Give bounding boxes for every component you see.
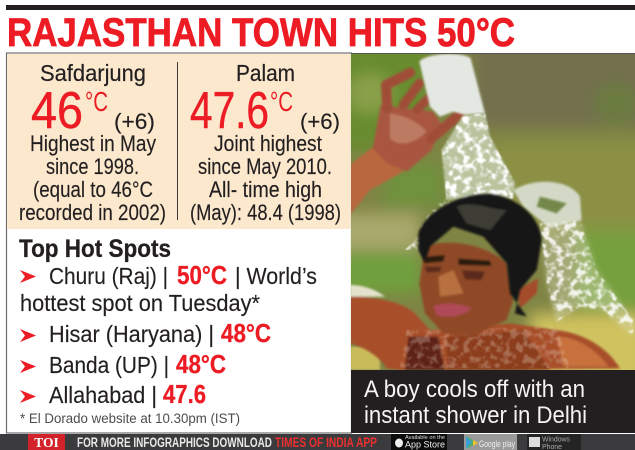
column: Palam: 47.6 [190,82,269,140]
raised hand and arm [350,73,460,215]
list item: Churu: | World’s [235,263,317,289]
title: RAJASTHAN TOWN HITS 50°C [7,11,515,55]
list item: Banda: 48°C [176,349,226,379]
water bottle [419,54,485,117]
photo background [351,54,635,370]
list item: Churu [20,260,317,316]
heading: Top Hot Spots [19,235,171,263]
list item: Allahabad: 47.6 [163,379,206,409]
column: Palam [190,60,341,225]
column: Palam: Palam [236,60,295,86]
panel: delhi temperatures [6,53,352,433]
column: Palam: since May 2010. [198,154,332,179]
column: Safdarjung [19,60,166,225]
footer bar [0,434,635,450]
panel: top hot spots [19,235,317,426]
column: Safdarjung: since 1998. [46,154,139,179]
list item: Hisar [20,318,271,348]
list item: Churu: Churu (Raj) | [49,263,168,289]
photo caption: A boy cools off with an [364,376,585,403]
windows phone badge [527,434,581,450]
list item: Hisar: Hisar (Haryana) | [49,321,214,347]
column: Palam: Joint highest [214,131,322,156]
list item: Banda: Banda (UP) | [49,352,169,378]
column: Safdarjung: 46 [31,82,83,140]
column: Palam: (May): 48.4 (1998) [190,200,341,225]
TOI logo: TOI [34,435,59,450]
download prompt: TIMES OF INDIA APP [275,435,377,450]
top rule [6,5,635,10]
app store badge: Available on the [405,435,445,441]
column: Safdarjung: recorded in 2002) [19,200,166,225]
hair [418,194,542,317]
list item: Allahabad [20,379,206,409]
google play badge: Google play [479,439,515,449]
photo caption: instant shower in Delhi [364,402,587,429]
app store badge [391,434,447,450]
water stream [442,113,515,200]
photo: boy pouring water over his head [351,54,635,370]
list item: Churu: hottest spot on Tuesday* [20,290,260,316]
list item: Allahabad: Allahabad | [49,382,157,408]
shoulders and chest [350,285,620,370]
list item: Hisar: 48°C [221,318,271,348]
column: Palam: °C [270,86,293,117]
column: Safdarjung: Safdarjung [40,60,146,86]
column: Palam: All- time high [209,177,322,202]
list item: Banda [20,349,226,379]
photo top line [351,53,635,54]
water splash [405,182,633,337]
column: Safdarjung: °C [85,86,108,117]
column: Palam: (+6) [300,109,340,134]
column: Safdarjung: (equal to 46°C [33,177,153,202]
TOI logo [28,434,65,450]
column: Safdarjung: Highest in May [30,131,156,156]
windows phone badge: Windows [542,436,570,444]
face [419,243,538,337]
google play badge [464,434,517,450]
column: Safdarjung: (+6) [114,109,155,134]
download prompt: FOR MORE INFOGRAPHICS DOWNLOAD [77,435,272,450]
footnote: * El Dorado website at 10.30pm (IST) [20,411,240,426]
list item: Churu: 50°C [177,260,227,290]
photo caption [351,370,635,433]
water on chest [400,327,570,368]
